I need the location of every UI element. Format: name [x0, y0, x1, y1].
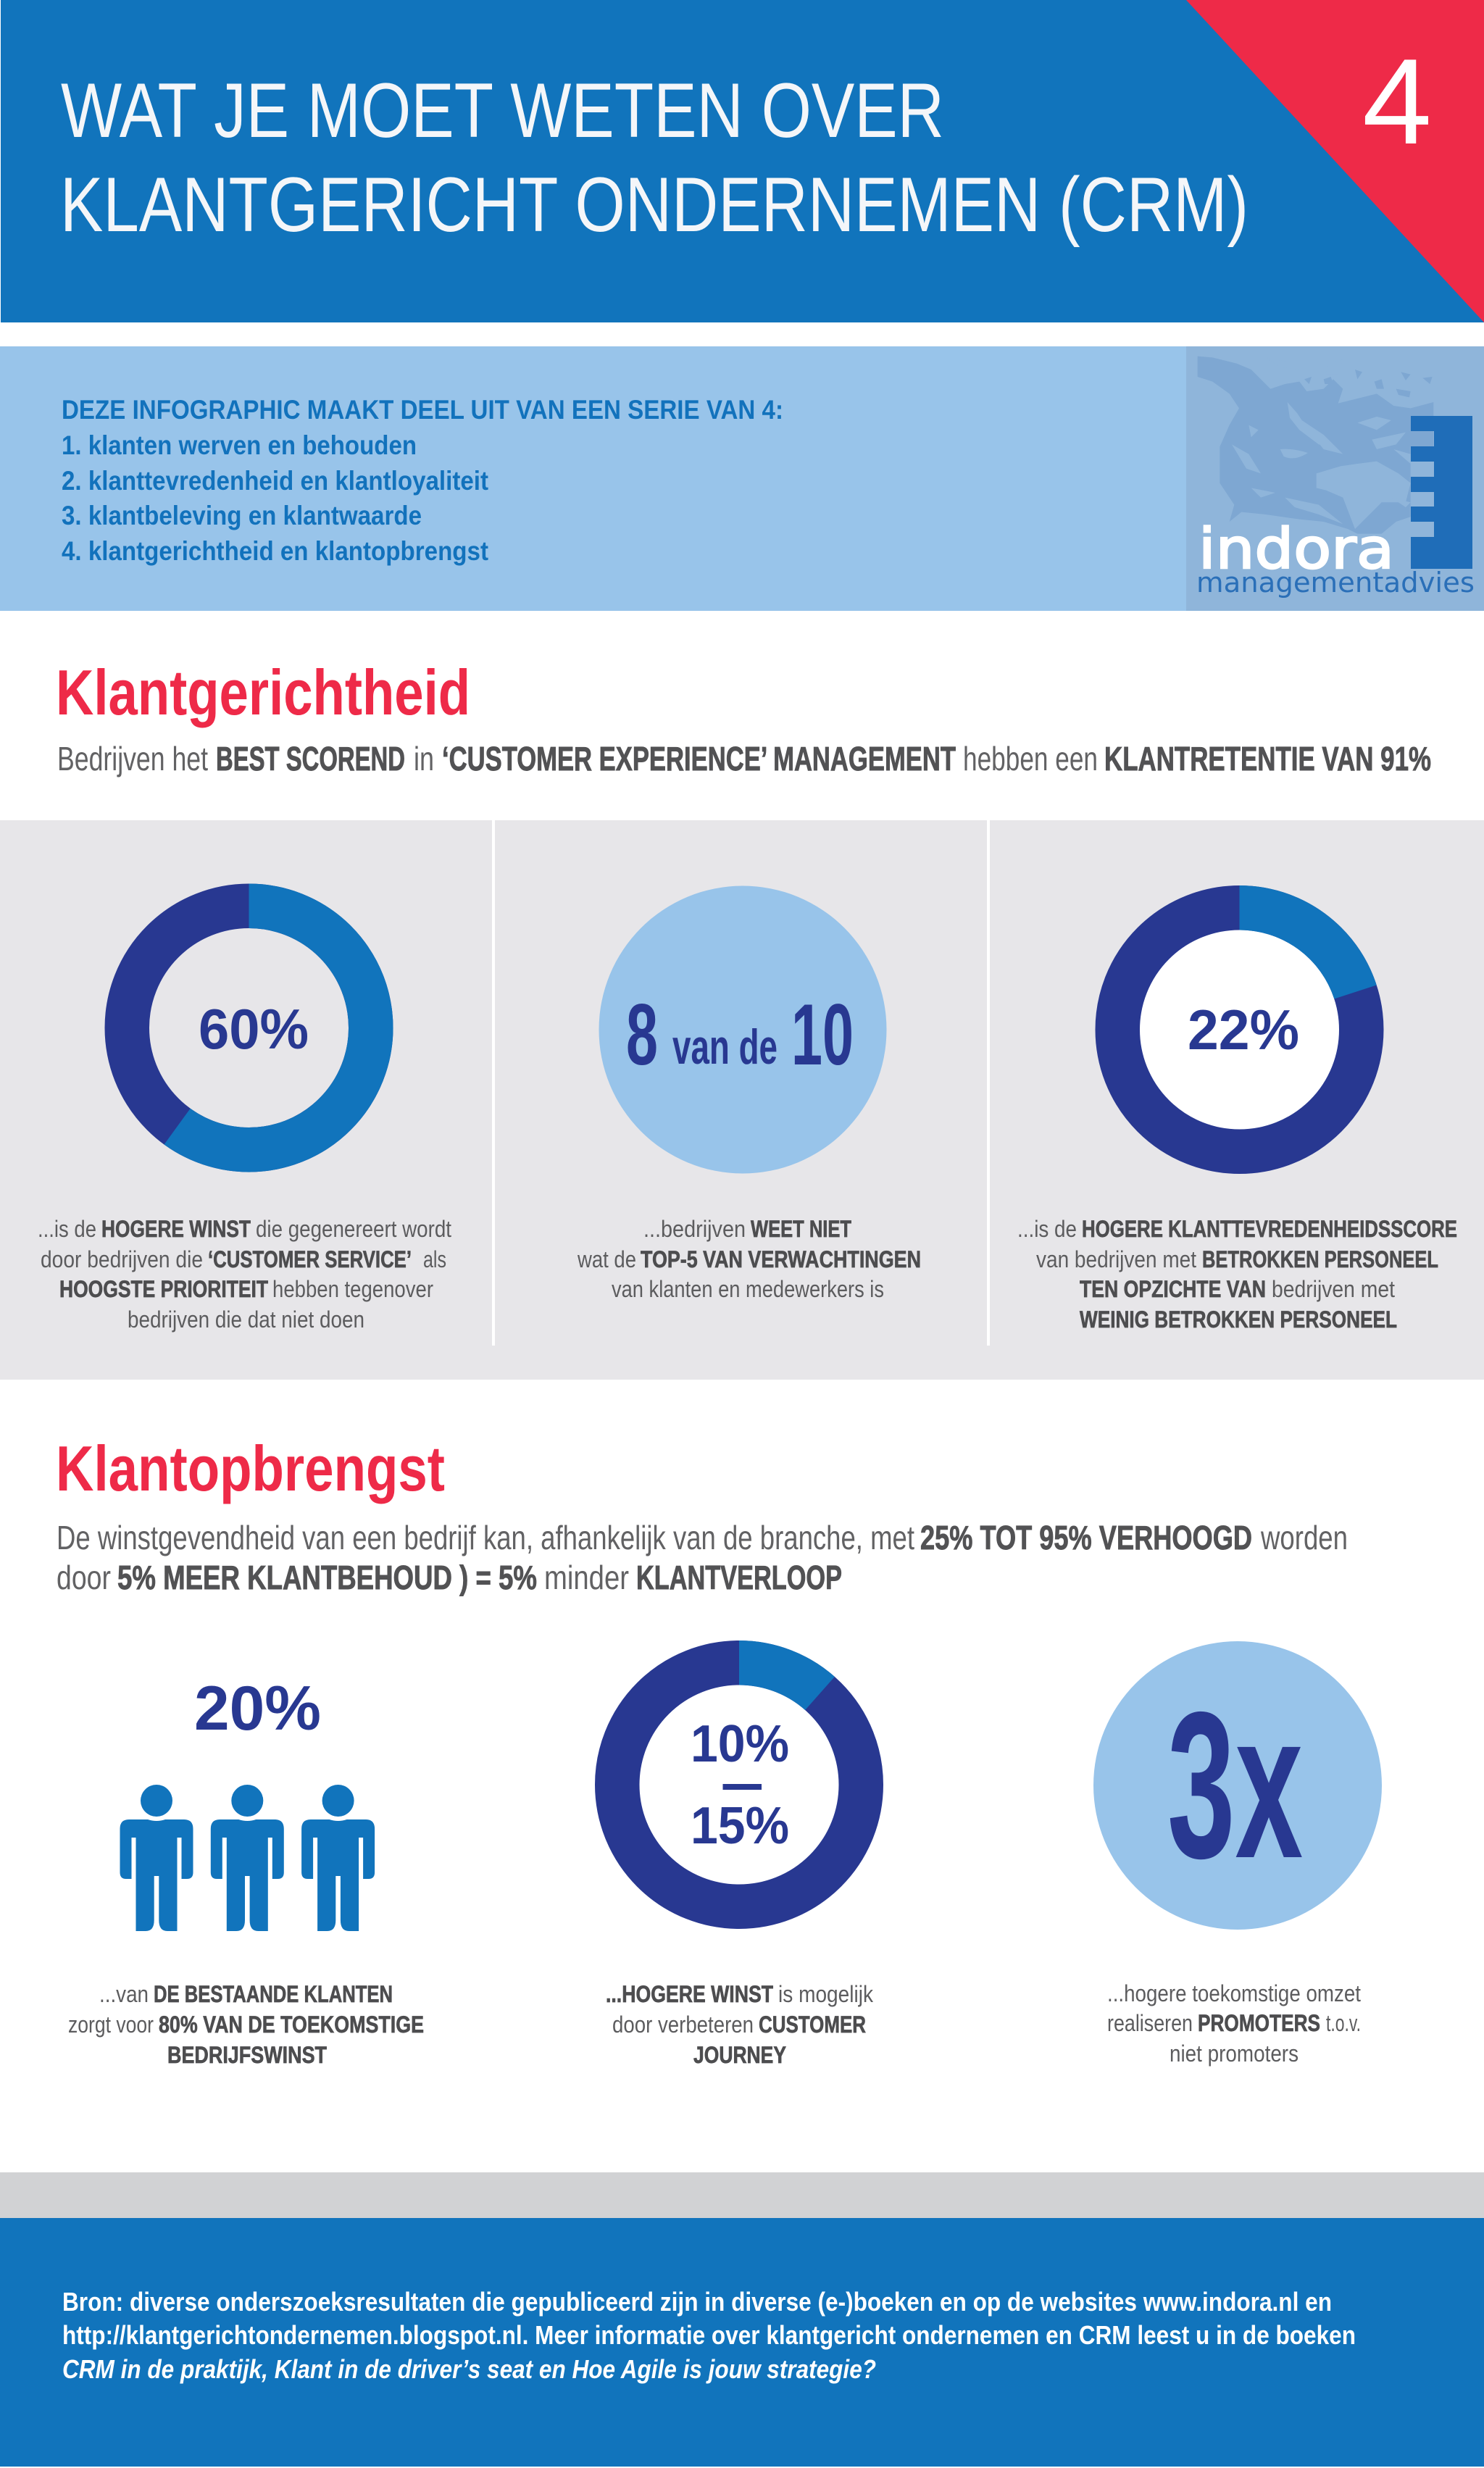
- series list text: [62, 395, 783, 566]
- subtitle: customer experience: [57, 740, 1431, 777]
- caption: hogere winst: door bedrijven die: [41, 1246, 203, 1272]
- caption: promoters: t.o.v.: [1326, 2010, 1361, 2036]
- subtitle: customer experience: Bedrijven het: [57, 740, 208, 777]
- caption: top-5 van verwachtingen: van klanten en medewerkers is: [612, 1276, 884, 1302]
- donut chart: 10% - 15%: 10%: [691, 1715, 789, 1773]
- donut chart: 10% - 15%: 15%: [691, 1797, 789, 1855]
- subtitle: customer experience: in: [414, 740, 434, 777]
- paragraph: winstgevendheid: minder: [544, 1559, 629, 1596]
- series intro band: [0, 346, 1484, 611]
- caption: promoters: realiseren: [1107, 2010, 1193, 2036]
- icon: map of North America: [1198, 357, 1433, 534]
- caption: hogere winst: als: [423, 1246, 446, 1272]
- caption: bestaande klanten: 80% VAN DE TOEKOMSTIGE: [159, 2011, 424, 2038]
- caption: hogere winst: die gegenereert wordt: [256, 1216, 451, 1242]
- stat: 20%: 20%: [194, 1674, 321, 1743]
- circle: 8 van de 10: [599, 885, 887, 1174]
- caption: promoters: PROMOTERS: [1198, 2010, 1320, 2036]
- caption: hogere winst: [38, 1216, 451, 1333]
- donut chart: 60%: [127, 906, 371, 1150]
- circle: 3x: [1093, 1641, 1382, 1930]
- circle: 8 van de 10: 10: [791, 986, 854, 1083]
- caption: promoters: [1107, 1980, 1361, 2067]
- caption: klanttevredenheidsscore: WEINIG BETROKKEN PERSONEEL: [1080, 1306, 1397, 1333]
- logo E mark: [1411, 416, 1472, 569]
- caption: customer journey: door verbeteren: [612, 2011, 754, 2038]
- series list text: 3. klantbeleving en klantwaarde: [62, 501, 422, 530]
- caption: hogere winst: HOOGSTE PRIORITEIT: [59, 1276, 268, 1302]
- caption: klanttevredenheidsscore: van bedrijven met: [1036, 1246, 1196, 1272]
- panel: statistics klantgerichtheid: [0, 820, 1484, 1380]
- donut chart: 10% - 15%: [617, 1663, 861, 1906]
- caption: bestaande klanten: [68, 1981, 424, 2068]
- caption: promoters: niet promoters: [1170, 2040, 1298, 2067]
- caption: klanttevredenheidsscore: TEN OPZICHTE VAN: [1080, 1276, 1266, 1302]
- caption: customer journey: CUSTOMER: [759, 2011, 866, 2038]
- caption: top-5 van verwachtingen: [577, 1216, 921, 1302]
- caption: bestaande klanten: ...van: [99, 1981, 149, 2007]
- circle: 8 van de 10: 8: [626, 986, 658, 1083]
- paragraph: winstgevendheid: worden: [1260, 1519, 1348, 1556]
- subtitle: customer experience: hebben een: [963, 740, 1098, 777]
- series list text: 2. klanttevredenheid en klantloyaliteit: [62, 466, 488, 496]
- footer: sources: [0, 2218, 1484, 2467]
- paragraph: winstgevendheid: 5% MEER KLANTBEHOUD ) = 5%: [117, 1559, 537, 1596]
- paragraph: winstgevendheid: KLANTVERLOOP: [636, 1559, 842, 1596]
- header banner: [1, 0, 1484, 322]
- footer: sources: CRM in de praktijk, Klant in de driver’s seat en Hoe Agile is jouw strategie?: [62, 2354, 876, 2384]
- donut chart: 22%: [1117, 908, 1362, 1151]
- title: WAT JE MOET WETEN OVER: [61, 67, 944, 154]
- series list text: 4. klantgerichtheid en klantopbrengst: [62, 536, 488, 566]
- caption: klanttevredenheidsscore: [1017, 1216, 1457, 1333]
- series list text: DEZE INFOGRAPHIC MAAKT DEEL UIT VAN EEN SERIE VAN 4:: [62, 395, 783, 425]
- caption: customer journey: [606, 1981, 874, 2068]
- circle: 8 van de 10: van de: [672, 1020, 778, 1075]
- grey separator band: [0, 2172, 1484, 2218]
- caption: top-5 van verwachtingen: TOP-5 VAN VERWACHTINGEN: [641, 1246, 921, 1272]
- logo wordmark: indora: [1199, 517, 1394, 582]
- caption: bestaande klanten: DE BESTAANDE KLANTEN: [154, 1981, 393, 2007]
- caption: klanttevredenheidsscore: bedrijven met: [1272, 1276, 1395, 1302]
- title: KLANTGERICHT ONDERNEMEN (CRM): [60, 161, 1249, 248]
- donut chart: 60%: 60%: [199, 997, 309, 1061]
- caption: hogere winst: ...is de: [38, 1216, 96, 1242]
- caption: hogere winst: HOGERE WINST: [101, 1216, 251, 1242]
- circle: 3x: 3x: [1167, 1669, 1304, 1902]
- subtitle: customer experience: ‘CUSTOMER EXPERIENCE’ MANAGEMENT: [442, 740, 956, 777]
- title: [60, 67, 1249, 248]
- caption: hogere winst: ‘CUSTOMER SERVICE’: [208, 1246, 412, 1272]
- caption: hogere winst: bedrijven die dat niet doen: [128, 1306, 364, 1333]
- paragraph: winstgevendheid: 25% TOT 95% VERHOOGD: [920, 1519, 1252, 1556]
- caption: top-5 van verwachtingen: ...bedrijven: [643, 1216, 746, 1242]
- caption: top-5 van verwachtingen: wat de: [577, 1246, 636, 1272]
- icon: three people: [120, 1785, 375, 1931]
- caption: top-5 van verwachtingen: WEET NIET: [751, 1216, 851, 1242]
- donut chart: 22%: 22%: [1188, 998, 1299, 1062]
- caption: customer journey: ...HOGERE WINST: [606, 1981, 773, 2007]
- paragraph: winstgevendheid: [57, 1519, 1348, 1596]
- heading: Klantgerichtheid: Klantgerichtheid: [56, 656, 470, 728]
- paragraph: winstgevendheid: De winstgevendheid van een bedrijf kan, afhankelijk van de branche, met: [57, 1519, 914, 1556]
- caption: klanttevredenheidsscore: ...is de: [1017, 1216, 1077, 1242]
- caption: bestaande klanten: BEDRIJFSWINST: [167, 2042, 327, 2068]
- series number: 4: [1362, 33, 1432, 170]
- series list text: 1. klanten werven en behouden: [62, 430, 417, 460]
- caption: bestaande klanten: zorgt voor: [68, 2011, 154, 2038]
- indora logo: [1186, 346, 1484, 611]
- caption: promoters: ...hogere toekomstige omzet: [1107, 1980, 1361, 2006]
- heading: Klantopbrengst: Klantopbrengst: [56, 1433, 445, 1504]
- red corner triangle: [1186, 0, 1484, 322]
- caption: customer journey: is mogelijk: [778, 1981, 874, 2007]
- logo tagline: managementadvies: [1196, 567, 1475, 599]
- caption: hogere winst: hebben tegenover: [272, 1276, 433, 1302]
- subtitle: customer experience: BEST SCOREND: [216, 740, 405, 777]
- paragraph: winstgevendheid: door: [57, 1559, 111, 1596]
- caption: customer journey: JOURNEY: [693, 2042, 786, 2068]
- footer: sources: Bron: diverse onderszoeksresultaten die gepubliceerd zijn in diverse (e-)boeken en op de websites www.indora.nl en: [62, 2287, 1332, 2317]
